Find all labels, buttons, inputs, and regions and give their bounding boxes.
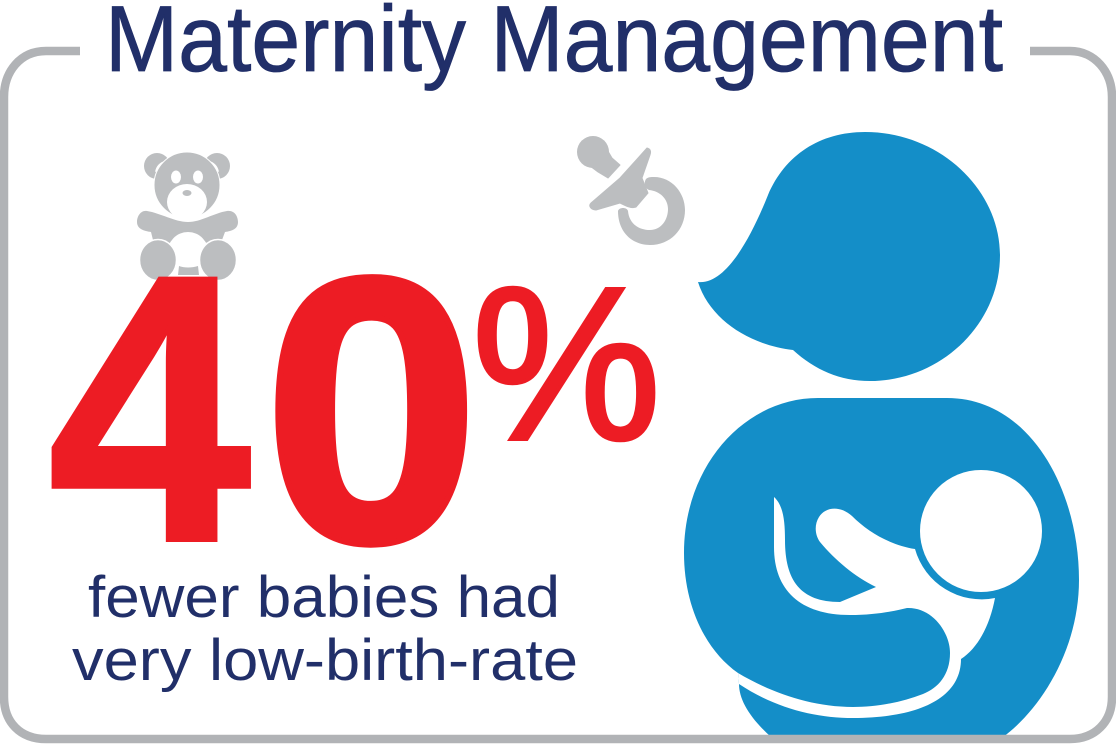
icon: pacifier	[577, 136, 685, 245]
caption: very low-birth-rate	[72, 628, 578, 693]
mother body	[684, 398, 1079, 737]
caption	[72, 565, 578, 693]
big number: 40: 4	[48, 196, 253, 621]
icon: teddy bear	[137, 152, 238, 280]
icon: mother and baby	[684, 132, 1079, 737]
mother head	[698, 132, 1000, 381]
baby arm and wrap	[738, 497, 995, 718]
big number: 40	[48, 196, 480, 622]
percent sign: %	[472, 243, 661, 486]
big number: 40: 0	[263, 200, 480, 622]
baby head	[920, 470, 1042, 592]
caption: fewer babies had	[88, 565, 560, 630]
